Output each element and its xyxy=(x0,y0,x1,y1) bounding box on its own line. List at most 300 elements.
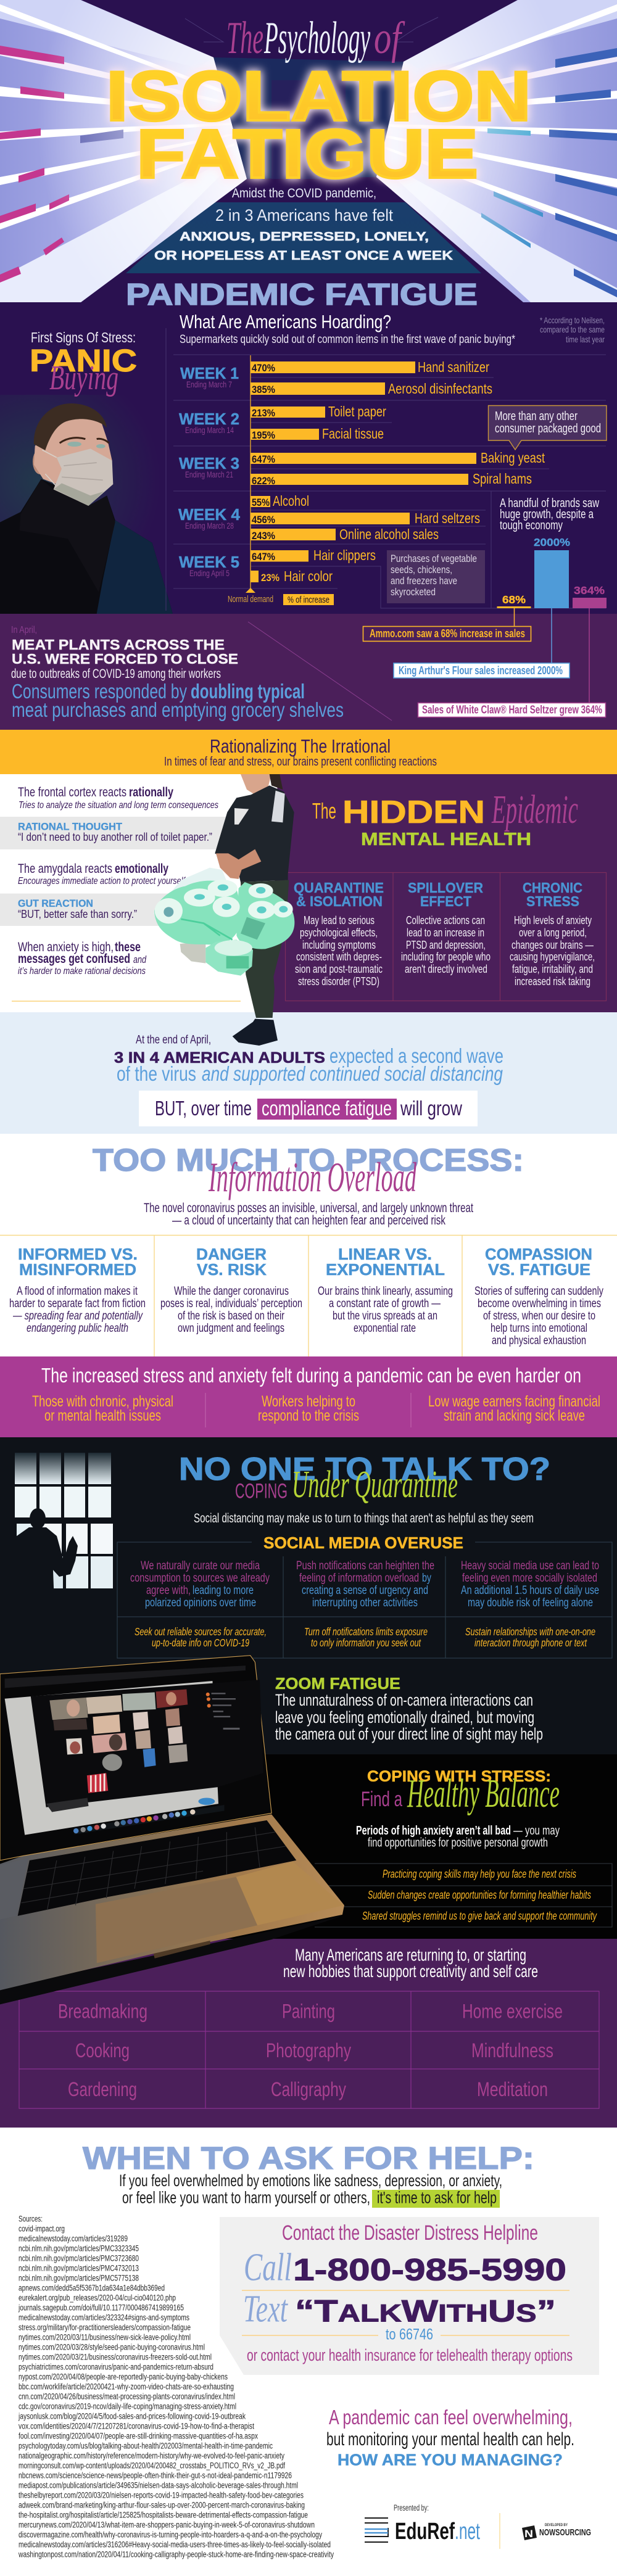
callout: compliance fatigue: compliance fatigue xyxy=(262,1097,392,1120)
column: spillover effect: SPILLOVER xyxy=(408,880,483,896)
week 3: WEEK 3 xyxy=(179,454,239,473)
panel: pandemic fatigue background xyxy=(0,302,617,614)
hobby grid: Cooking xyxy=(75,2039,130,2062)
amygdala text: Encourages immediate action to protect yourself xyxy=(18,876,186,886)
column: curated media: up-to-date info on COVID-19 xyxy=(152,1637,249,1649)
heading: coping with stress: Find a xyxy=(361,1788,402,1811)
heading: too much to process: TOO MUCH TO PROCESS: xyxy=(93,1142,524,1178)
panel: second wave xyxy=(0,1012,617,1134)
sources list: eurekalert.org/pub_releases/2020-04/cul-cio040120.php xyxy=(19,2293,176,2302)
meat plants text xyxy=(11,625,344,721)
panel: too much to process xyxy=(0,1134,617,1356)
column: push notifications: to only information you seek out xyxy=(311,1637,421,1649)
hobby grid: Calligraphy xyxy=(271,2078,346,2100)
column: quarantine and isolation: consistent with depres- xyxy=(296,951,382,963)
group: workers xyxy=(258,1393,359,1424)
sources list: cdc.gov/coronavirus/2019-ncov/daily-life-coping/managing-stress-anxiety.html xyxy=(19,2402,236,2411)
group: workers: Workers helping to xyxy=(262,1393,355,1410)
column: spillover effect: lead to an increase in xyxy=(407,927,484,939)
meat plants text: meat purchases and emptying grocery shelves xyxy=(12,698,344,721)
column: informed vs misinformed: A flood of information makes it xyxy=(17,1285,138,1298)
hobby grid: Gardening xyxy=(68,2078,137,2100)
anxiety text: When anxiety is high, xyxy=(18,940,114,954)
column: chronic stress: fatigue, irritability, and xyxy=(512,963,593,975)
logo: NowSourcing: N xyxy=(524,2528,533,2540)
callout: vegetable seeds xyxy=(387,550,485,603)
list: coping benefits xyxy=(362,1868,597,1922)
rational thought xyxy=(18,820,212,843)
week 2: Ending March 14 xyxy=(185,426,234,435)
column: quarantine and isolation: including symptoms xyxy=(302,939,376,951)
sources list: medicalnewstoday.com/articles/323324#signs-and-symptoms xyxy=(19,2313,189,2322)
column: push notifications: Push notifications can heighten the xyxy=(296,1559,434,1572)
call number xyxy=(244,2245,566,2289)
brand callouts xyxy=(363,608,606,717)
sources list: covid-impact.org xyxy=(19,2224,65,2233)
text keyword: Text xyxy=(243,2289,288,2330)
sources list: medicalnewstoday.com/articles/316206#Heavy-social-media-users-three-times-as-likely-to-feel-socially-isolated xyxy=(19,2540,331,2549)
column: danger vs risk: own judgment and feelings xyxy=(178,1322,284,1335)
heading: coping with stress xyxy=(361,1768,560,1816)
column: heavy use xyxy=(461,1559,599,1649)
hero subtitle: ANXIOUS, DEPRESSED, LONELY, xyxy=(180,230,429,244)
column: linear vs exponential: LINEAR VS. xyxy=(338,1245,432,1263)
column: spillover effect: aren't directly involved xyxy=(405,963,487,975)
sources list: medicalnewstoday.com/articles/319289 xyxy=(19,2234,128,2243)
advice text: it's time to ask for help xyxy=(377,2189,497,2207)
column: push notifications: Turn off notifications limits exposure xyxy=(304,1625,428,1638)
sources list: adweek.com/brand-marketing/king-arthur-flour-sales-up-over-2000-percent-march-coronavirus-baking xyxy=(19,2501,305,2509)
anxiety text: these xyxy=(115,940,141,954)
intro text: The novel coronavirus posses an invisible, universal, and largely unknown threat xyxy=(144,1201,473,1215)
column: chronic stress: High levels of anxiety xyxy=(514,914,592,927)
anxiety text xyxy=(18,940,146,976)
column: curated media xyxy=(130,1559,270,1649)
week 4: 456% xyxy=(252,514,275,526)
hero subtitle: 2 in 3 Americans have felt xyxy=(215,206,393,225)
meat plants text: due to outbreaks of COVID-19 among their workers xyxy=(11,667,221,681)
column: push notifications xyxy=(296,1559,434,1649)
panel: harder on xyxy=(0,1356,617,1437)
intro text: — a cloud of uncertainty that can heighten fear and perceived risk xyxy=(172,1213,445,1228)
callout: vegetable seeds: Purchases of vegetable xyxy=(391,553,477,564)
column: compassion vs fatigue: COMPASSION xyxy=(485,1245,592,1263)
heading: too much to process: Information Overload xyxy=(208,1154,417,1200)
column: informed vs misinformed: INFORMED VS. xyxy=(18,1245,138,1263)
column: spillover effect xyxy=(401,880,491,975)
gut reaction: GUT REACTION xyxy=(18,898,93,909)
title: The Psychology of: of xyxy=(374,13,405,64)
heading: the hidden epidemic: MENTAL HEALTH xyxy=(361,830,531,849)
sources list: jaysonlusk.com/blog/2020/4/5/food-sales-and-prices-following-covid-19-outbreak xyxy=(18,2412,246,2421)
week 5: Ending April 5 xyxy=(189,569,230,578)
column: quarantine and isolation: May lead to serious xyxy=(304,914,375,927)
panel: second wave: of the virus xyxy=(117,1062,196,1085)
week 3: Spiral hams xyxy=(473,471,532,487)
week 2: 195% xyxy=(252,429,275,441)
sources list: journals.sagepub.com/doi/full/10.1177/0004867419899165 xyxy=(18,2303,184,2312)
intro text: find opportunities for positive personal growth xyxy=(368,1836,548,1849)
week 5: WEEK 5 xyxy=(179,553,239,571)
title: ISOLATION FATIGUE: FATIGUE xyxy=(136,115,478,192)
column: quarantine and isolation: stress disorder (PTSD) xyxy=(298,975,379,988)
callout: compliance fatigue: BUT, over time xyxy=(155,1097,252,1120)
week 1: Aerosol disinfectants xyxy=(388,381,492,397)
banner: rationalizing the irrational: Rationalizing The Irrational xyxy=(210,735,391,757)
callout: compliance fatigue: will grow xyxy=(400,1097,462,1120)
sources list: psychiatrictimes.com/coronavirus/panic-and-pandemics-return-absurd xyxy=(19,2363,213,2371)
panel: when to ask for help xyxy=(0,2128,617,2576)
sources list: the-hospitalist.org/hospitalist/article/125825/hospitalists-beware-detrimental-effects-compassion-fatigue xyxy=(19,2511,308,2519)
callout: ammo: Ammo.com saw a 68% increase in sales xyxy=(370,627,525,640)
panel: second wave: 3 IN 4 AMERICAN ADULTS xyxy=(114,1049,325,1067)
bar chart: weekly hoarding xyxy=(166,328,606,611)
amygdala text: emotionally xyxy=(115,862,168,876)
sources list: ncbi.nlm.nih.gov/pmc/articles/PMC3323345 xyxy=(19,2244,139,2253)
hero subtitle: Amidst the COVID pandemic, xyxy=(232,186,376,200)
column: curated media: polarized opinions over time xyxy=(145,1596,256,1609)
gut reaction: “BUT, better safe than sorry.” xyxy=(18,907,137,920)
banner: rationalizing the irrational xyxy=(0,730,617,774)
column: quarantine and isolation: QUARANTINE xyxy=(294,880,384,896)
hobby grid: Painting xyxy=(282,2000,335,2022)
amygdala text xyxy=(18,862,186,886)
week 3: 622% xyxy=(252,475,275,487)
panel: coping with stress xyxy=(0,1754,617,1939)
panel: second wave: and supported continued social distancing xyxy=(202,1062,503,1085)
legend xyxy=(228,594,334,605)
week 5: 647% xyxy=(252,551,275,563)
brand growth chart xyxy=(497,497,607,608)
column: curated media: Seek out reliable sources for accurate, xyxy=(135,1625,267,1638)
callout: vegetable seeds: seeds, chickens, xyxy=(391,564,452,576)
meat plants text: U.S. WERE FORCED TO CLOSE xyxy=(12,651,238,667)
column: compassion vs fatigue: help turns into emotional xyxy=(491,1322,587,1335)
intro text: — you may xyxy=(513,1824,560,1838)
rational thought: RATIONAL THOUGHT xyxy=(18,820,123,833)
intro text: Periods of high anxiety aren’t all bad xyxy=(356,1824,511,1838)
call number: Call xyxy=(244,2245,292,2289)
photo: woman with toilet paper xyxy=(152,774,294,1046)
panel: brain reactions xyxy=(0,774,278,1012)
brand growth chart: 364% xyxy=(574,584,605,597)
column: curated media: consumption to sources we already xyxy=(130,1572,270,1585)
column: chronic stress: increased risk taking xyxy=(515,975,590,988)
sources list: ncbi.nlm.nih.gov/pmc/articles/PMC5775138 xyxy=(19,2274,139,2282)
group: workers: respond to the crisis xyxy=(258,1407,359,1424)
panel: hobbies xyxy=(0,1939,617,2128)
sources list: morningconsult.com/wp-content/uploads/2020/04/200482_crosstabs_POLITICO_RVs_v2_JB.pdf xyxy=(19,2461,285,2470)
hobby grid: Photography xyxy=(266,2039,351,2062)
hobby grid xyxy=(58,2000,563,2100)
callout: vegetable seeds: skyrocketed xyxy=(391,586,436,598)
closing message: HOW ARE YOU MANAGING? xyxy=(337,2450,563,2469)
sources list: nbcnews.com/science/science-news/people-often-think-their-gut-s-not-ideal-pandemic-n1179926 xyxy=(19,2471,292,2480)
logo: EduRef.net: EduRef xyxy=(395,2519,455,2545)
column: informed vs misinformed: — spreading fear and potentially xyxy=(12,1310,143,1323)
sources list: bbc.com/worklife/article/20200421-why-zoom-video-chats-are-so-exhausting xyxy=(19,2382,234,2391)
logo: EduRef.net: .net xyxy=(455,2519,480,2545)
column: compassion vs fatigue: VS. FATIGUE xyxy=(488,1260,590,1279)
week 3 xyxy=(179,450,545,487)
column: danger vs risk: DANGER xyxy=(196,1245,267,1263)
closing message xyxy=(326,2406,574,2469)
column: informed vs misinformed xyxy=(9,1245,146,1335)
zoom fatigue text xyxy=(275,1674,543,1743)
heading: no one to talk to xyxy=(179,1451,550,1506)
sources list: vox.com/identities/2020/4/7/21207281/coronavirus-covid-19-how-to-find-a-therapist xyxy=(19,2422,254,2430)
brand growth chart: 68% xyxy=(502,593,526,606)
panel: disaster distress helpline: to 66746 xyxy=(386,2326,433,2343)
heading: What Are Americans Hoarding xyxy=(180,311,515,346)
week 3: 647% xyxy=(252,453,275,465)
week 4: 243% xyxy=(252,530,275,542)
banner: rationalizing the irrational: In times of fear and stress, our brains present conflicting reactions xyxy=(164,755,437,769)
gut reaction xyxy=(18,898,137,920)
amygdala text: The amygdala reacts xyxy=(18,862,112,876)
logo: NowSourcing: DEVELOPED BY xyxy=(545,2524,568,2527)
sources list: ncbi.nlm.nih.gov/pmc/articles/PMC3723680 xyxy=(19,2254,139,2263)
sources list: discovermagazine.com/health/why-coronavirus-is-turning-people-into-hoarders-a-q-and-a-on-the-psychology xyxy=(19,2530,322,2539)
panel: second wave: expected a second wave xyxy=(329,1044,503,1067)
title: ISOLATION FATIGUE: FATIGUE xyxy=(136,115,478,192)
photo: man in mask xyxy=(0,395,173,614)
group: chronic conditions xyxy=(32,1393,173,1424)
week 2: 213% xyxy=(252,407,275,419)
column: chronic stress xyxy=(510,880,595,988)
column: spillover effect: EFFECT xyxy=(420,893,471,909)
sources list: fool.com/investing/2020/04/07/people-are-still-drinking-massive-quantities-of-ha.aspx xyxy=(19,2432,258,2440)
legend: % of increase xyxy=(288,595,329,605)
heading: the hidden epidemic: The xyxy=(312,798,336,824)
column: danger vs risk xyxy=(160,1245,302,1335)
sources list: psychologytoday.com/us/blog/talking-about-health/202003/mental-health-in-time-pandemic xyxy=(19,2442,273,2450)
sources list: Sources: xyxy=(19,2215,43,2223)
sources list: mercurynews.com/2020/04/13/what-item-are-shoppers-panic-buying-in-week-5-of-coronavirus-shutdown xyxy=(19,2520,315,2529)
logo: NowSourcing xyxy=(522,2524,591,2540)
column: compassion vs fatigue xyxy=(474,1245,603,1347)
hobby grid: Home exercise xyxy=(462,2000,563,2022)
hobby grid: Meditation xyxy=(477,2078,548,2100)
callout: more than any other: More than any other xyxy=(495,410,578,423)
logo: NowSourcing: NOWSOURCING xyxy=(539,2527,591,2538)
frontal cortex text: The frontal cortex reacts xyxy=(18,785,126,799)
week 5: 23% xyxy=(261,572,280,584)
sources list: nypost.com/2020/04/08/people-are-reportedly-panic-buying-baby-chickens xyxy=(19,2372,228,2381)
note: Nielsen source: time last year xyxy=(566,334,605,344)
week 5: Hair color xyxy=(284,568,333,584)
sources list: nytimes.com/2020/03/21/business/coronavirus-freezers-sold-out.html xyxy=(19,2353,212,2361)
brand growth chart: 2000% xyxy=(534,536,570,548)
heading: the hidden epidemic xyxy=(312,787,578,849)
callout: vegetable seeds: and freezers have xyxy=(391,575,457,587)
presented by: Presented by: xyxy=(394,2503,429,2512)
panel: second wave: At the end of April, xyxy=(136,1034,211,1046)
photo: silhouette at window xyxy=(12,1453,113,1604)
week 2: WEEK 2 xyxy=(179,410,239,428)
title: The Psychology of: Psychology xyxy=(263,13,370,64)
week 1 xyxy=(180,359,492,397)
intro text xyxy=(356,1824,560,1849)
week 4: Online alcohol sales xyxy=(339,526,439,542)
column: chronic stress: CHRONIC xyxy=(523,880,582,896)
column: push notifications: creating a sense of urgency and xyxy=(302,1584,428,1597)
sources list: mediapost.com/publications/article/349635/nielsen-data-says-alcoholic-beverage-sales-through.html xyxy=(19,2481,298,2490)
week 1: Hand sanitizer xyxy=(418,359,489,375)
column: linear vs exponential: a constant rate of growth — xyxy=(329,1297,441,1310)
week 1: WEEK 1 xyxy=(180,364,239,382)
title: The Psychology of: The xyxy=(226,13,263,64)
heading: coping with stress: COPING WITH STRESS: xyxy=(367,1768,551,1785)
column: push notifications: by xyxy=(422,1572,431,1585)
heading: too much to process xyxy=(93,1142,524,1200)
panic buying title: Buying xyxy=(49,359,118,397)
callout: more than any other xyxy=(489,406,607,450)
group: chronic conditions: or mental health issues xyxy=(44,1407,161,1424)
anxiety text: messages get confused xyxy=(18,952,130,966)
panel: hidden epidemic xyxy=(271,774,617,1012)
title: ISOLATION FATIGUE: ISOLATION xyxy=(106,57,531,136)
heading: no one to talk to: COPING xyxy=(235,1479,288,1503)
week 3: Baking yeast xyxy=(481,450,545,466)
column: danger vs risk: VS. RISK xyxy=(197,1260,267,1279)
sources list: cnn.com/2020/04/26/business/meat-processing-plants-coronavirus/index.html xyxy=(19,2392,235,2401)
week 4: Ending March 28 xyxy=(185,521,234,530)
title: ISOLATION FATIGUE: ISOLATION xyxy=(106,57,531,136)
brand growth chart: tough economy xyxy=(500,519,563,532)
heading: no one to talk to: Under Quarantine xyxy=(292,1464,458,1506)
title: ISOLATION FATIGUE xyxy=(106,57,531,192)
panel: meat plants band xyxy=(0,614,617,730)
column: quarantine and isolation xyxy=(294,880,384,988)
frontal cortex text: rationally xyxy=(129,785,173,799)
hobby grid: Mindfulness xyxy=(471,2039,553,2062)
week 4: Hard seltzers xyxy=(415,510,480,526)
sources list: theshelbyreport.com/2020/03/20/nielsen-reports-covid-19-impacted-health-safety-food-bev-categories xyxy=(19,2491,304,2500)
intro text xyxy=(144,1201,473,1228)
sources list xyxy=(18,2215,334,2559)
axis marker xyxy=(246,588,255,593)
column: curated media: leading to more xyxy=(193,1584,254,1597)
panel: no one to talk to xyxy=(0,1437,617,1754)
text keyword: “T ALK W ITH US” xyxy=(295,2293,556,2328)
meat plants text: In April, xyxy=(11,625,37,635)
panel: disaster distress helpline xyxy=(220,2217,599,2375)
heading: PANDEMIC FATIGUE: PANDEMIC FATIGUE xyxy=(126,278,478,312)
sources list: nytimes.com/2020/03/11/business/new-sick-leave-policy.html xyxy=(19,2333,191,2342)
hero subtitle: OR HOPELESS AT LEAST ONCE A WEEK xyxy=(154,249,453,263)
photo: laptop on zoom call xyxy=(0,1656,344,2004)
week 1: 470% xyxy=(252,362,275,374)
week 2: Facial tissue xyxy=(322,426,384,442)
hero: empty supermarket aisle xyxy=(0,0,617,305)
column: quarantine and isolation: & ISOLATION xyxy=(296,893,383,909)
week 3: Ending March 21 xyxy=(185,470,233,479)
column: chronic stress: STRESS xyxy=(526,893,579,909)
callout: king arthur xyxy=(394,663,569,678)
callout: compliance fatigue xyxy=(139,1091,478,1126)
panic buying title xyxy=(30,329,137,397)
hero subtitle xyxy=(154,186,453,263)
week 2: Toilet paper xyxy=(328,403,386,419)
column: spillover effect: Collective actions can xyxy=(406,914,485,927)
rational thought: “I don’t need to buy another roll of toilet paper.” xyxy=(18,830,212,843)
group: low wage earners xyxy=(428,1393,600,1424)
column: informed vs misinformed: harder to separate fact from fiction xyxy=(9,1297,146,1310)
column: danger vs risk: poses is real, individuals’ perception xyxy=(160,1297,302,1310)
week 1: 385% xyxy=(252,384,275,395)
column: linear vs exponential: EXPONENTIAL xyxy=(326,1260,445,1279)
column: danger vs risk: of the risk is based on their xyxy=(178,1310,285,1323)
heading: social media overuse: SOCIAL MEDIA OVERUSE xyxy=(263,1534,463,1552)
meat plants text: MEAT PLANTS ACROSS THE xyxy=(12,637,225,653)
column: informed vs misinformed: endangering public health xyxy=(27,1322,128,1335)
column: curated media: We naturally curate our media xyxy=(141,1559,260,1572)
meat plants text: Consumers responded by xyxy=(12,680,187,703)
heading: the hidden epidemic: HIDDEN xyxy=(342,795,485,830)
column: chronic stress: over a long period, xyxy=(519,927,587,939)
frontal cortex text: Tries to analyze the situation and long term consequences xyxy=(19,800,218,811)
advice text xyxy=(119,2171,502,2208)
sources list: apnews.com/dedd5a5f5367b1da634a1e84dbb369ed xyxy=(19,2284,165,2292)
callout: ammo xyxy=(363,627,531,642)
panic buying title: First Signs Of Stress: xyxy=(31,329,136,345)
column: linear vs exponential xyxy=(318,1245,453,1335)
column: push notifications: feeling of information overload xyxy=(299,1572,419,1585)
advice text: or feel like you want to harm yourself or others, xyxy=(122,2189,370,2207)
column: spillover effect: including for people who xyxy=(401,951,491,963)
title: The Psychology of xyxy=(226,13,405,64)
hobby grid: Breadmaking xyxy=(58,2000,147,2022)
week 4 xyxy=(178,493,480,542)
week 5 xyxy=(179,547,376,584)
sources list: nationalgeographic.com/history/reference/modern-history/why-we-evolved-to-feel-panic-anxiety xyxy=(19,2451,284,2460)
week 2 xyxy=(179,403,386,442)
frontal cortex text xyxy=(18,785,218,811)
column: push notifications: interrupting other activities xyxy=(312,1596,418,1609)
heading: What Are Americans Hoarding: Supermarkets quickly sold out of common items in the first wave of panic buying* xyxy=(180,332,515,346)
column: informed vs misinformed: MISINFORMED xyxy=(19,1260,136,1279)
logo: EduRef.net xyxy=(365,2518,480,2545)
week 4: Alcohol xyxy=(273,493,309,509)
week 5: Hair clippers xyxy=(313,547,376,563)
column: curated media: agree with, xyxy=(146,1584,191,1597)
column: quarantine and isolation: sion and post-traumatic xyxy=(295,963,383,975)
zoom fatigue text: ZOOM FATIGUE xyxy=(275,1674,400,1693)
note: Nielsen source xyxy=(540,315,605,344)
column: danger vs risk: While the danger coronavirus xyxy=(174,1285,289,1298)
heading: What Are Americans Hoarding: What Are Americans Hoarding? xyxy=(180,311,391,332)
week 4: 55% xyxy=(252,497,270,508)
sources list: nytimes.com/2020/03/28/style/seed-panic-buying-coronavirus.html xyxy=(19,2343,205,2351)
column: chronic stress: changes our brains — xyxy=(511,939,594,951)
group: chronic conditions: Those with chronic, physical xyxy=(32,1393,173,1410)
column: compassion vs fatigue: and physical exhaustion xyxy=(492,1334,586,1347)
week 1: Ending March 7 xyxy=(186,380,232,389)
column: linear vs exponential: exponential rate xyxy=(354,1322,416,1335)
panic buying title: PANIC xyxy=(30,343,137,378)
column: quarantine and isolation: psychological effects, xyxy=(300,927,378,939)
column: spillover effect: PTSD and depression, xyxy=(406,939,486,951)
anxiety text: it’s harder to make rational decisions xyxy=(18,966,146,976)
text keyword xyxy=(243,2289,556,2330)
column: linear vs exponential: but the virus spreads at an xyxy=(333,1310,437,1323)
heading: no one to talk to: NO ONE TO TALK TO? xyxy=(179,1451,550,1487)
sources list: washingtonpost.com/nation/2020/04/11/cooking-calligraphy-people-stuck-home-are-finding-new-space-creativity xyxy=(18,2550,334,2559)
heading: when to ask for help: WHEN TO ASK FOR HELP: xyxy=(83,2140,534,2176)
legend: Normal demand xyxy=(228,594,273,605)
meat plants text: doubling typical xyxy=(191,680,305,703)
